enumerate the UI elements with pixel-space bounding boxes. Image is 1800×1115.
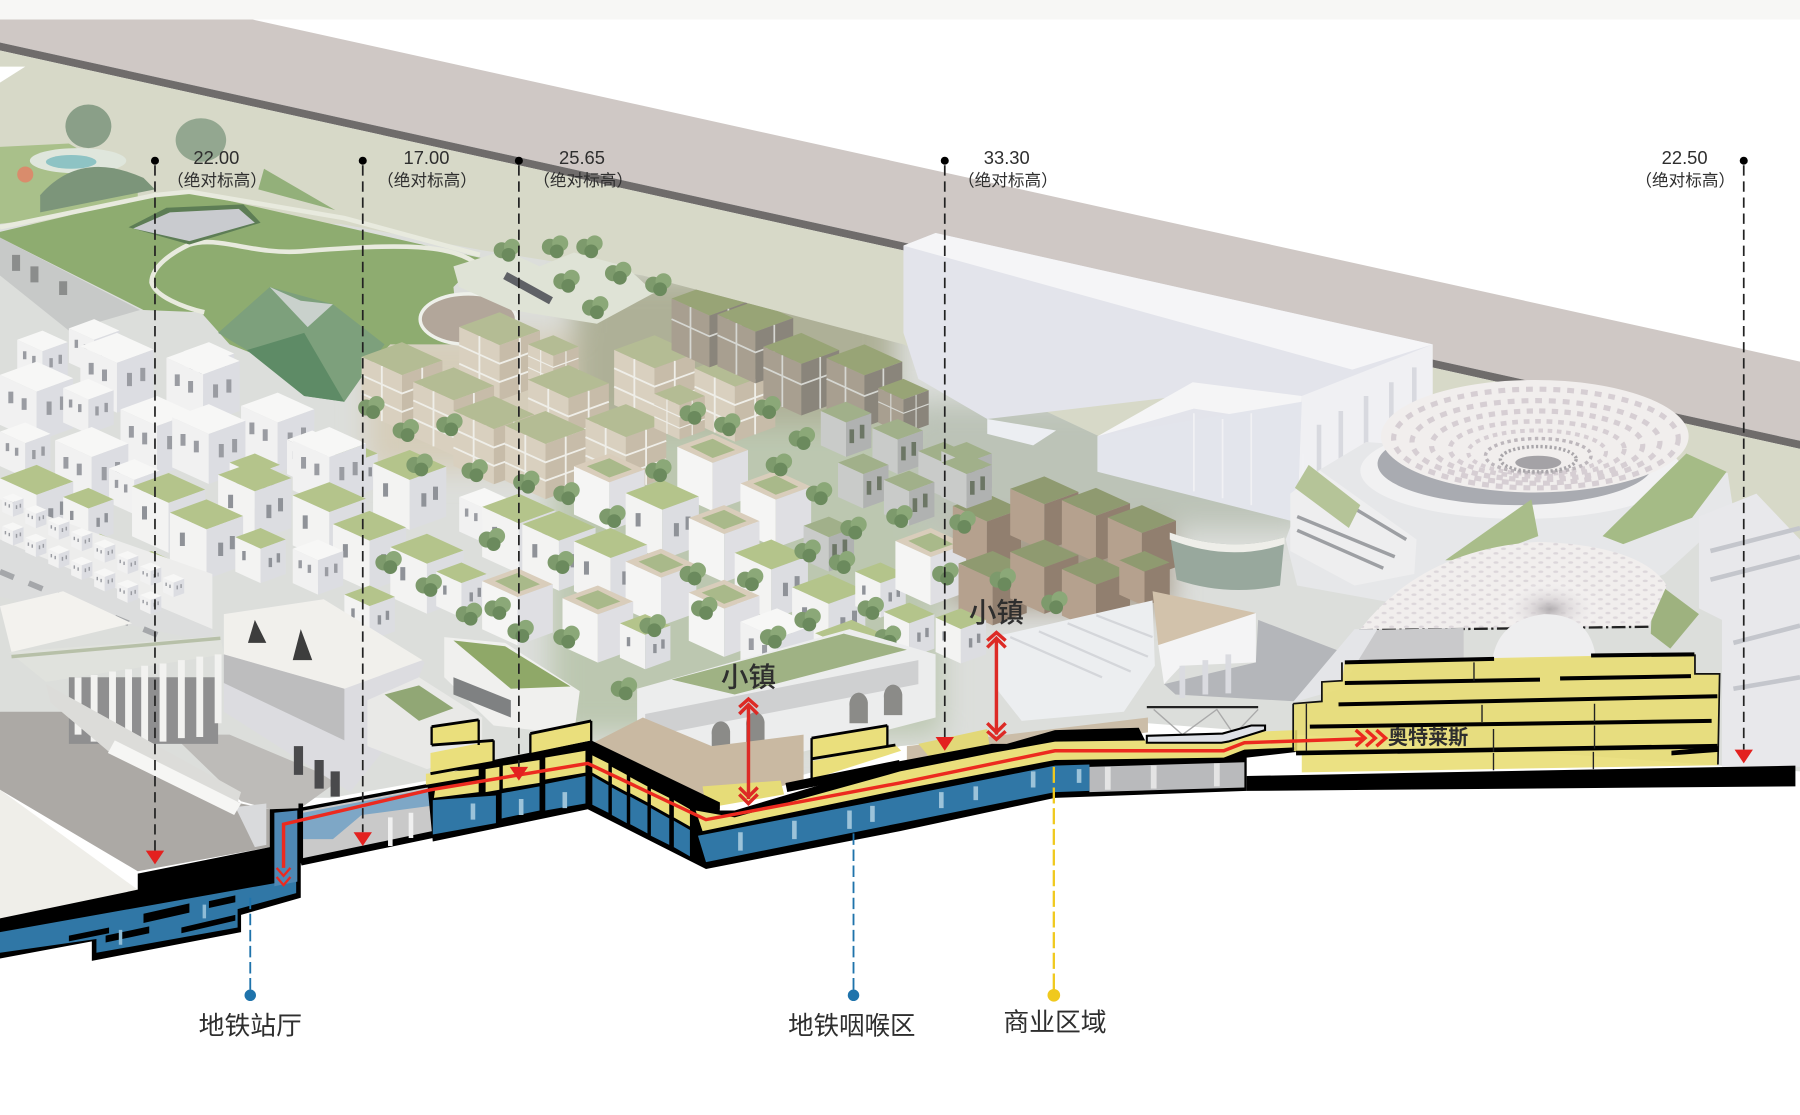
upper canopy dome bbox=[1381, 380, 1689, 492]
red vertical arrow at first town bbox=[739, 699, 758, 804]
amphitheatre plaza bbox=[420, 235, 672, 344]
town buildings, clipped to the section line bbox=[0, 285, 1176, 700]
label: town 1: 小镇 bbox=[721, 661, 776, 692]
metro concourse section bbox=[0, 808, 301, 961]
right white buildings bbox=[1699, 494, 1800, 767]
gray perforated building bbox=[224, 599, 425, 797]
lower canopy dome bbox=[1293, 542, 1667, 703]
paved ground beside the gray building bbox=[172, 735, 339, 809]
elevation marker 22.00: （绝对标高） bbox=[167, 171, 267, 190]
outlet mall section bbox=[1293, 654, 1720, 772]
elevation marker 17.00: （绝对标高） bbox=[377, 171, 477, 190]
vertical transfer shaft bbox=[274, 810, 297, 886]
park outer path bbox=[0, 192, 480, 255]
elevation marker 33.30 bbox=[936, 147, 1058, 751]
station hall with columns bbox=[0, 591, 241, 815]
elevated road band bbox=[0, 20, 1800, 449]
glass pavilion bbox=[1147, 707, 1265, 743]
west row houses and facade bbox=[0, 494, 212, 643]
upper canopy dome podium bbox=[1286, 422, 1733, 649]
callout: metro throat area bbox=[788, 833, 915, 1040]
callout: metro concourse bbox=[199, 898, 302, 1040]
callout: metro concourse: 地铁站厅 bbox=[199, 1011, 302, 1040]
rooftop park bbox=[0, 169, 482, 390]
label: outlet: 奥特莱斯 bbox=[1388, 726, 1468, 749]
elevation marker 25.65: 25.65 bbox=[559, 147, 605, 168]
terrace buildings above the section bbox=[367, 629, 1148, 808]
pitched white roof, walls and undercroft bbox=[996, 591, 1342, 721]
main section black structure bbox=[427, 728, 1297, 869]
black slab segments over the section bbox=[426, 720, 900, 806]
elevation marker 33.30: （绝对标高） bbox=[958, 171, 1058, 190]
label: town 2: 小镇 bbox=[969, 597, 1024, 628]
elevation marker 17.00: 17.00 bbox=[403, 147, 449, 168]
underground room beside the shaft bbox=[301, 783, 433, 863]
station entrance block bbox=[235, 804, 266, 847]
callout: metro throat area: 地铁咽喉区 bbox=[788, 1012, 915, 1040]
elevation marker 17.00 bbox=[354, 147, 477, 846]
elevation marker 22.00 bbox=[146, 147, 267, 864]
large white civic building bbox=[903, 233, 1433, 522]
metro throat blue zone bbox=[433, 765, 1089, 862]
gray room under the outlet link bbox=[1089, 762, 1244, 792]
elevation marker 33.30: 33.30 bbox=[984, 147, 1030, 168]
callout: commercial area bbox=[1003, 767, 1107, 1037]
elevation marker 25.65 bbox=[510, 147, 633, 781]
curved teal building bbox=[1170, 533, 1285, 590]
sage land strip bbox=[0, 51, 1800, 551]
skylight crater bbox=[129, 204, 261, 245]
gray plaza ground bbox=[0, 712, 270, 871]
outlet foundation slab bbox=[1247, 766, 1795, 791]
elevation marker 25.65: （绝对标高） bbox=[533, 171, 633, 190]
elevation marker 22.50 bbox=[1635, 147, 1753, 763]
elevation marker 22.50: （绝对标高） bbox=[1635, 171, 1735, 190]
elevation marker 22.00: 22.00 bbox=[193, 147, 239, 168]
callout: commercial area: 商业区域 bbox=[1003, 1008, 1107, 1037]
commercial yellow zone bbox=[426, 721, 1295, 831]
pale ground wedge bbox=[0, 790, 138, 918]
blurred colour base of the town bbox=[0, 224, 1800, 798]
park inner loop path bbox=[152, 242, 480, 312]
red circulation line bbox=[277, 730, 1386, 885]
park polyhedral building bbox=[218, 287, 385, 402]
top band bbox=[0, 0, 1800, 20]
playground and tree belt bbox=[0, 104, 226, 224]
elevation marker 22.50: 22.50 bbox=[1662, 147, 1708, 168]
red vertical arrow at second town bbox=[987, 633, 1006, 739]
